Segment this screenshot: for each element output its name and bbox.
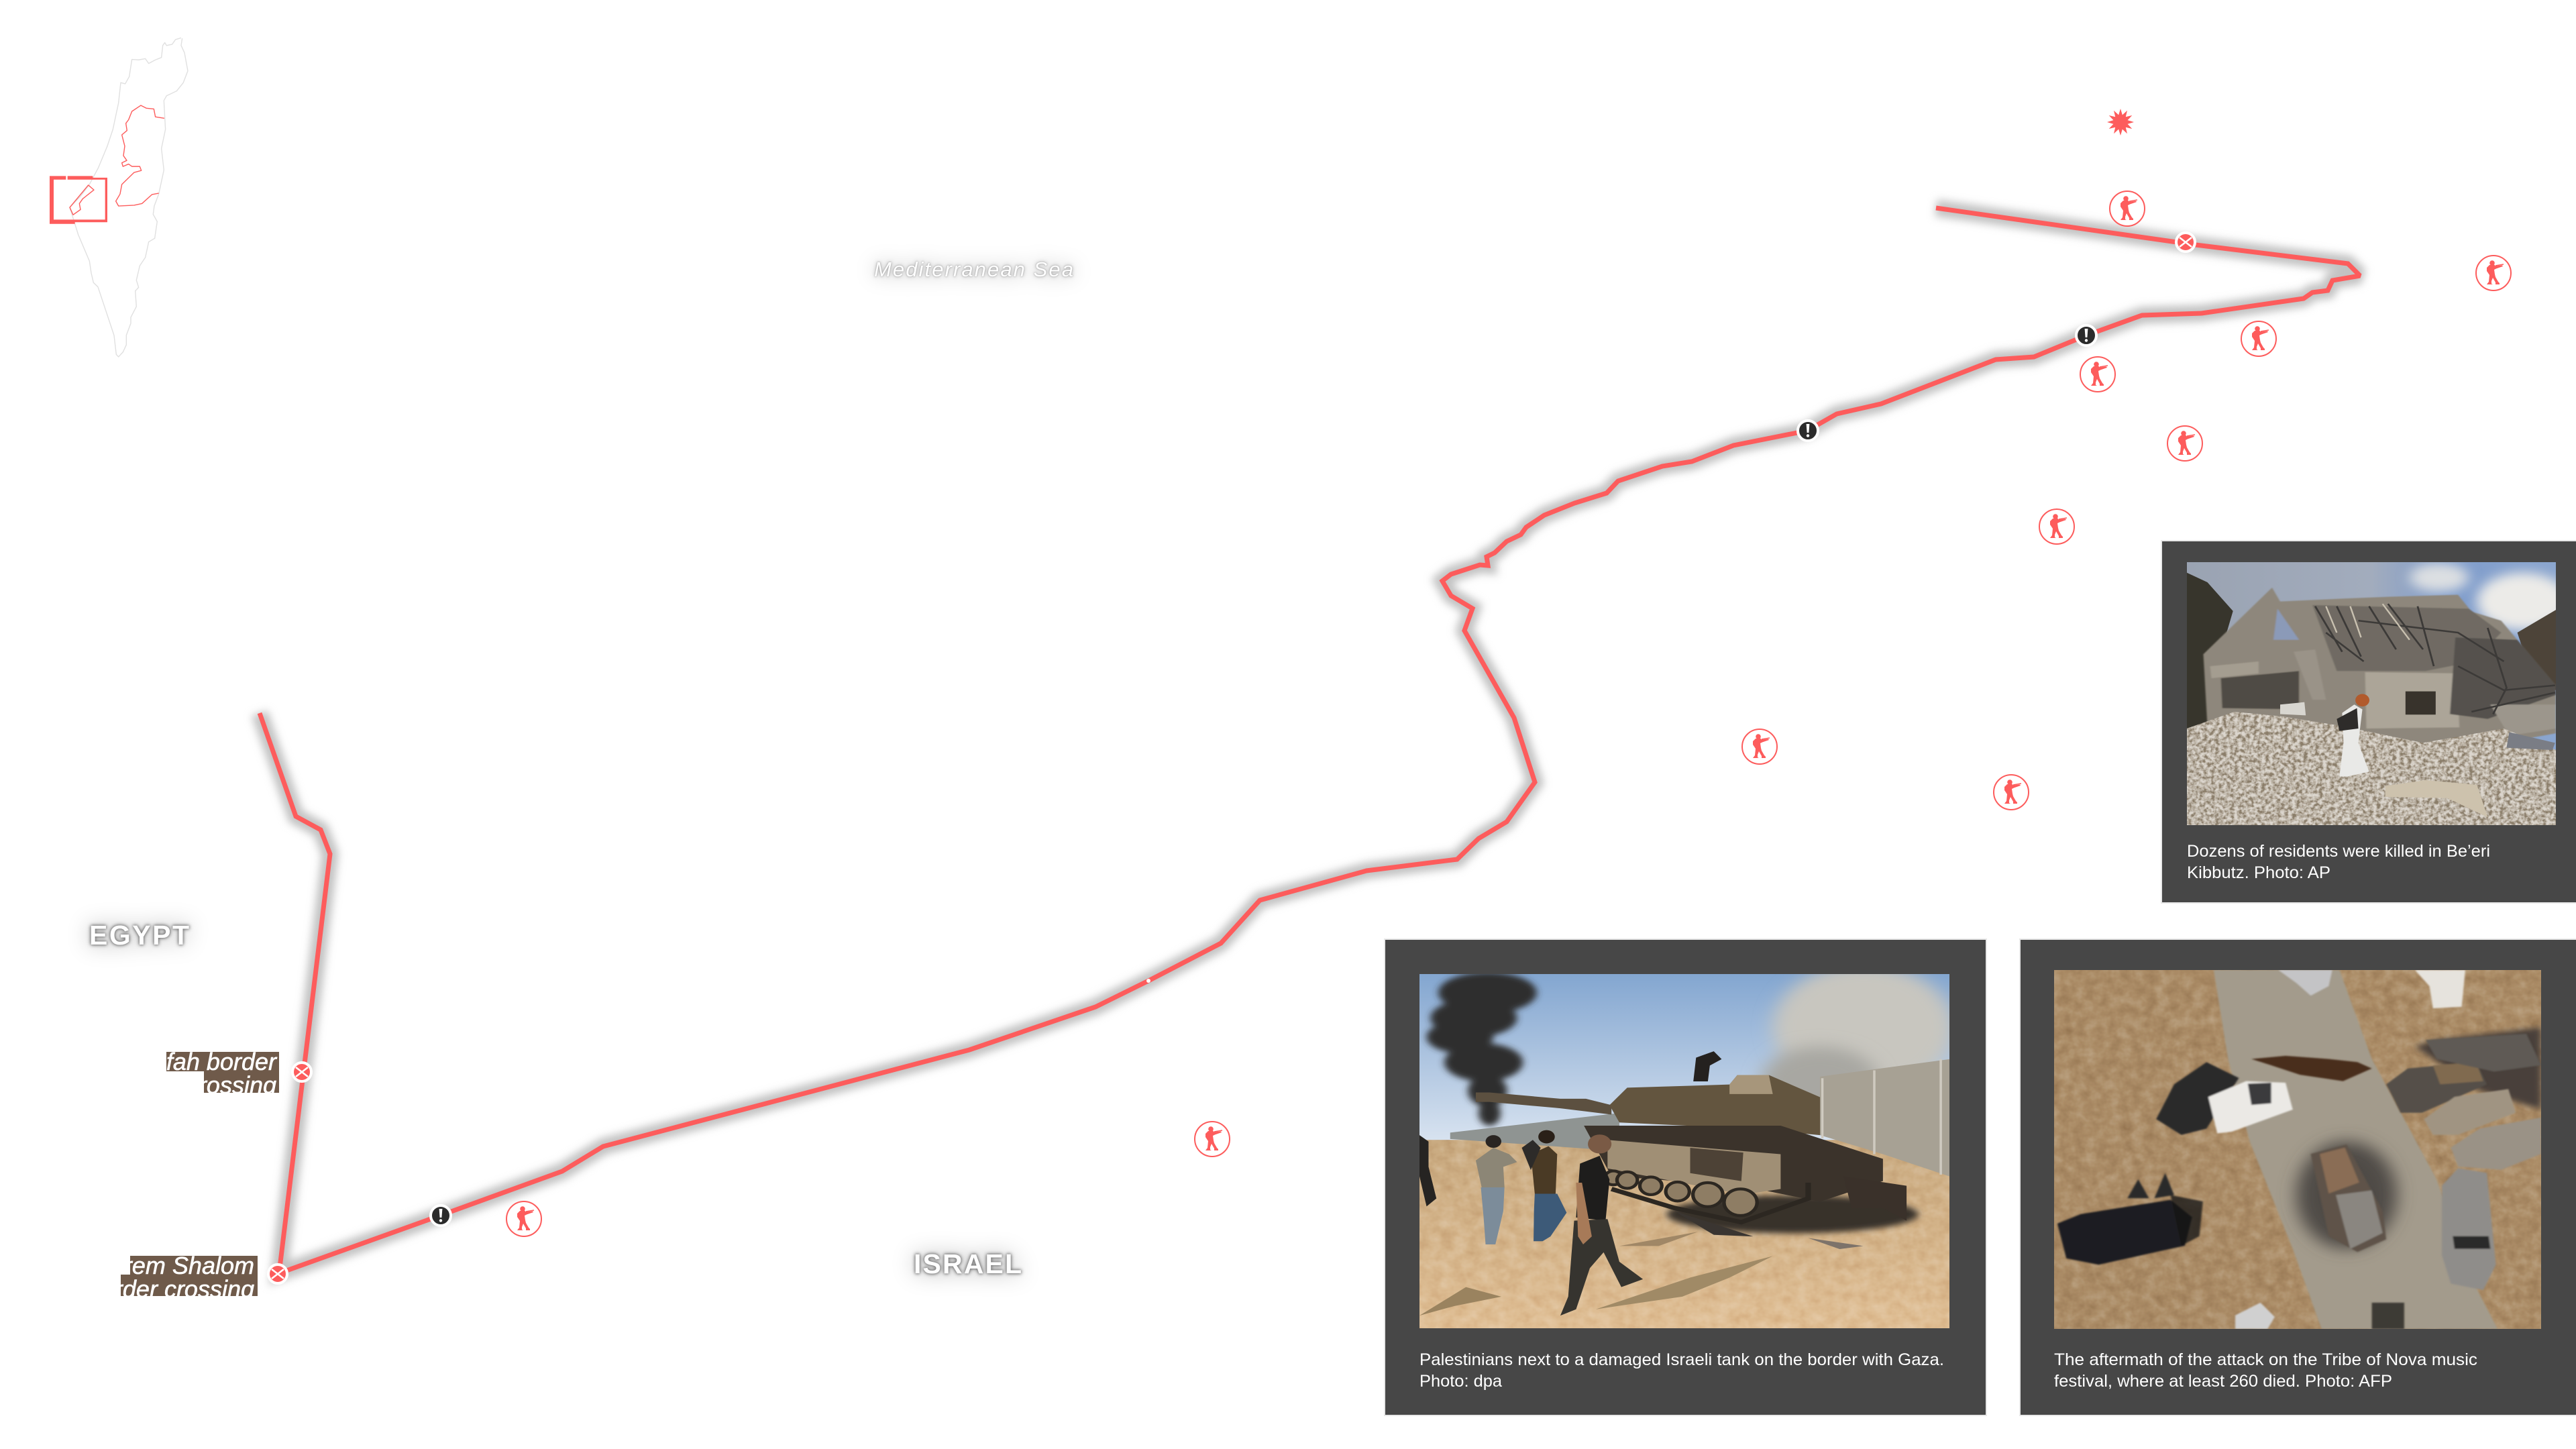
caption: Dozens of residents were killed in Be’eri (2187, 842, 2490, 861)
label: Kerem Shalom border crossing: Kerem Shalom (95, 1252, 254, 1279)
locator box (50, 176, 107, 224)
caption (2054, 1350, 2477, 1391)
label: Rafah border crossing: crossing (186, 1071, 276, 1099)
icon: attack site 9 (1195, 1122, 1230, 1157)
icon: attack site 7 (1742, 729, 1777, 764)
label: Kerem Shalom border crossing: border crossing (88, 1275, 254, 1303)
photo: damaged tank (1419, 974, 1949, 1328)
icon: explosion (2107, 109, 2134, 136)
locator map of Israel (50, 38, 188, 357)
caption (1419, 1350, 1944, 1391)
panel: Be'eri Kibbutz photo (2161, 541, 2576, 903)
tank (1476, 1051, 1919, 1233)
rescue worker (2337, 694, 2369, 776)
West Bank outline (116, 105, 164, 206)
photo: burnt cars (2054, 970, 2541, 1329)
panel: Tribe of Nova festival photo (2020, 939, 2576, 1415)
icon: attack site 2 (2476, 256, 2511, 290)
border line (260, 208, 2360, 1273)
caption (2187, 842, 2490, 882)
cars (2057, 970, 2541, 1329)
icon: attack site 6 (2039, 509, 2074, 544)
icon: alert, south (431, 1205, 451, 1226)
photo: destroyed house (2187, 562, 2556, 825)
sea label: Mediterranean Sea (874, 258, 1073, 281)
icon: attack site 10 (506, 1201, 541, 1236)
Israel outline (70, 38, 188, 357)
icon: closed crossing, Kerem Shalom (268, 1265, 287, 1283)
house body (2204, 588, 2556, 753)
label: Rafah border crossing: Rafah border (136, 1048, 278, 1075)
icon: closed crossing, Rafah (292, 1063, 311, 1081)
label: Rafah border crossing (166, 1052, 279, 1093)
icon: closed crossing, Erez (2176, 233, 2195, 252)
icon: attack site 8 (1994, 775, 2029, 810)
icon: attack site 4 (2080, 357, 2115, 392)
people (1419, 1130, 1643, 1316)
rubble (2187, 712, 2556, 825)
icon: attack site 5 (2167, 426, 2202, 461)
caption: Photo: dpa (1419, 1372, 1502, 1391)
icon: attack site 3 (2241, 321, 2276, 356)
label: Kerem Shalom border crossing (121, 1256, 258, 1296)
panel: damaged tank photo (1385, 939, 1986, 1415)
Gaza outline (70, 185, 94, 215)
country label: Israel: ISRAEL (914, 1248, 1022, 1279)
caption: Kibbutz. Photo: AP (2187, 863, 2330, 882)
country label: Egypt: EGYPT (89, 920, 189, 951)
icon: alert, middle (1798, 421, 1818, 441)
caption: Palestinians next to a damaged Israeli tank on the border with Gaza. (1419, 1350, 1944, 1369)
caption: The aftermath of the attack on the Tribe of Nova music (2054, 1350, 2477, 1369)
caption: festival, where at least 260 died. Photo: AFP (2054, 1372, 2392, 1391)
icon: attack site 1 (2110, 191, 2145, 226)
icon: alert, north (2076, 325, 2096, 345)
